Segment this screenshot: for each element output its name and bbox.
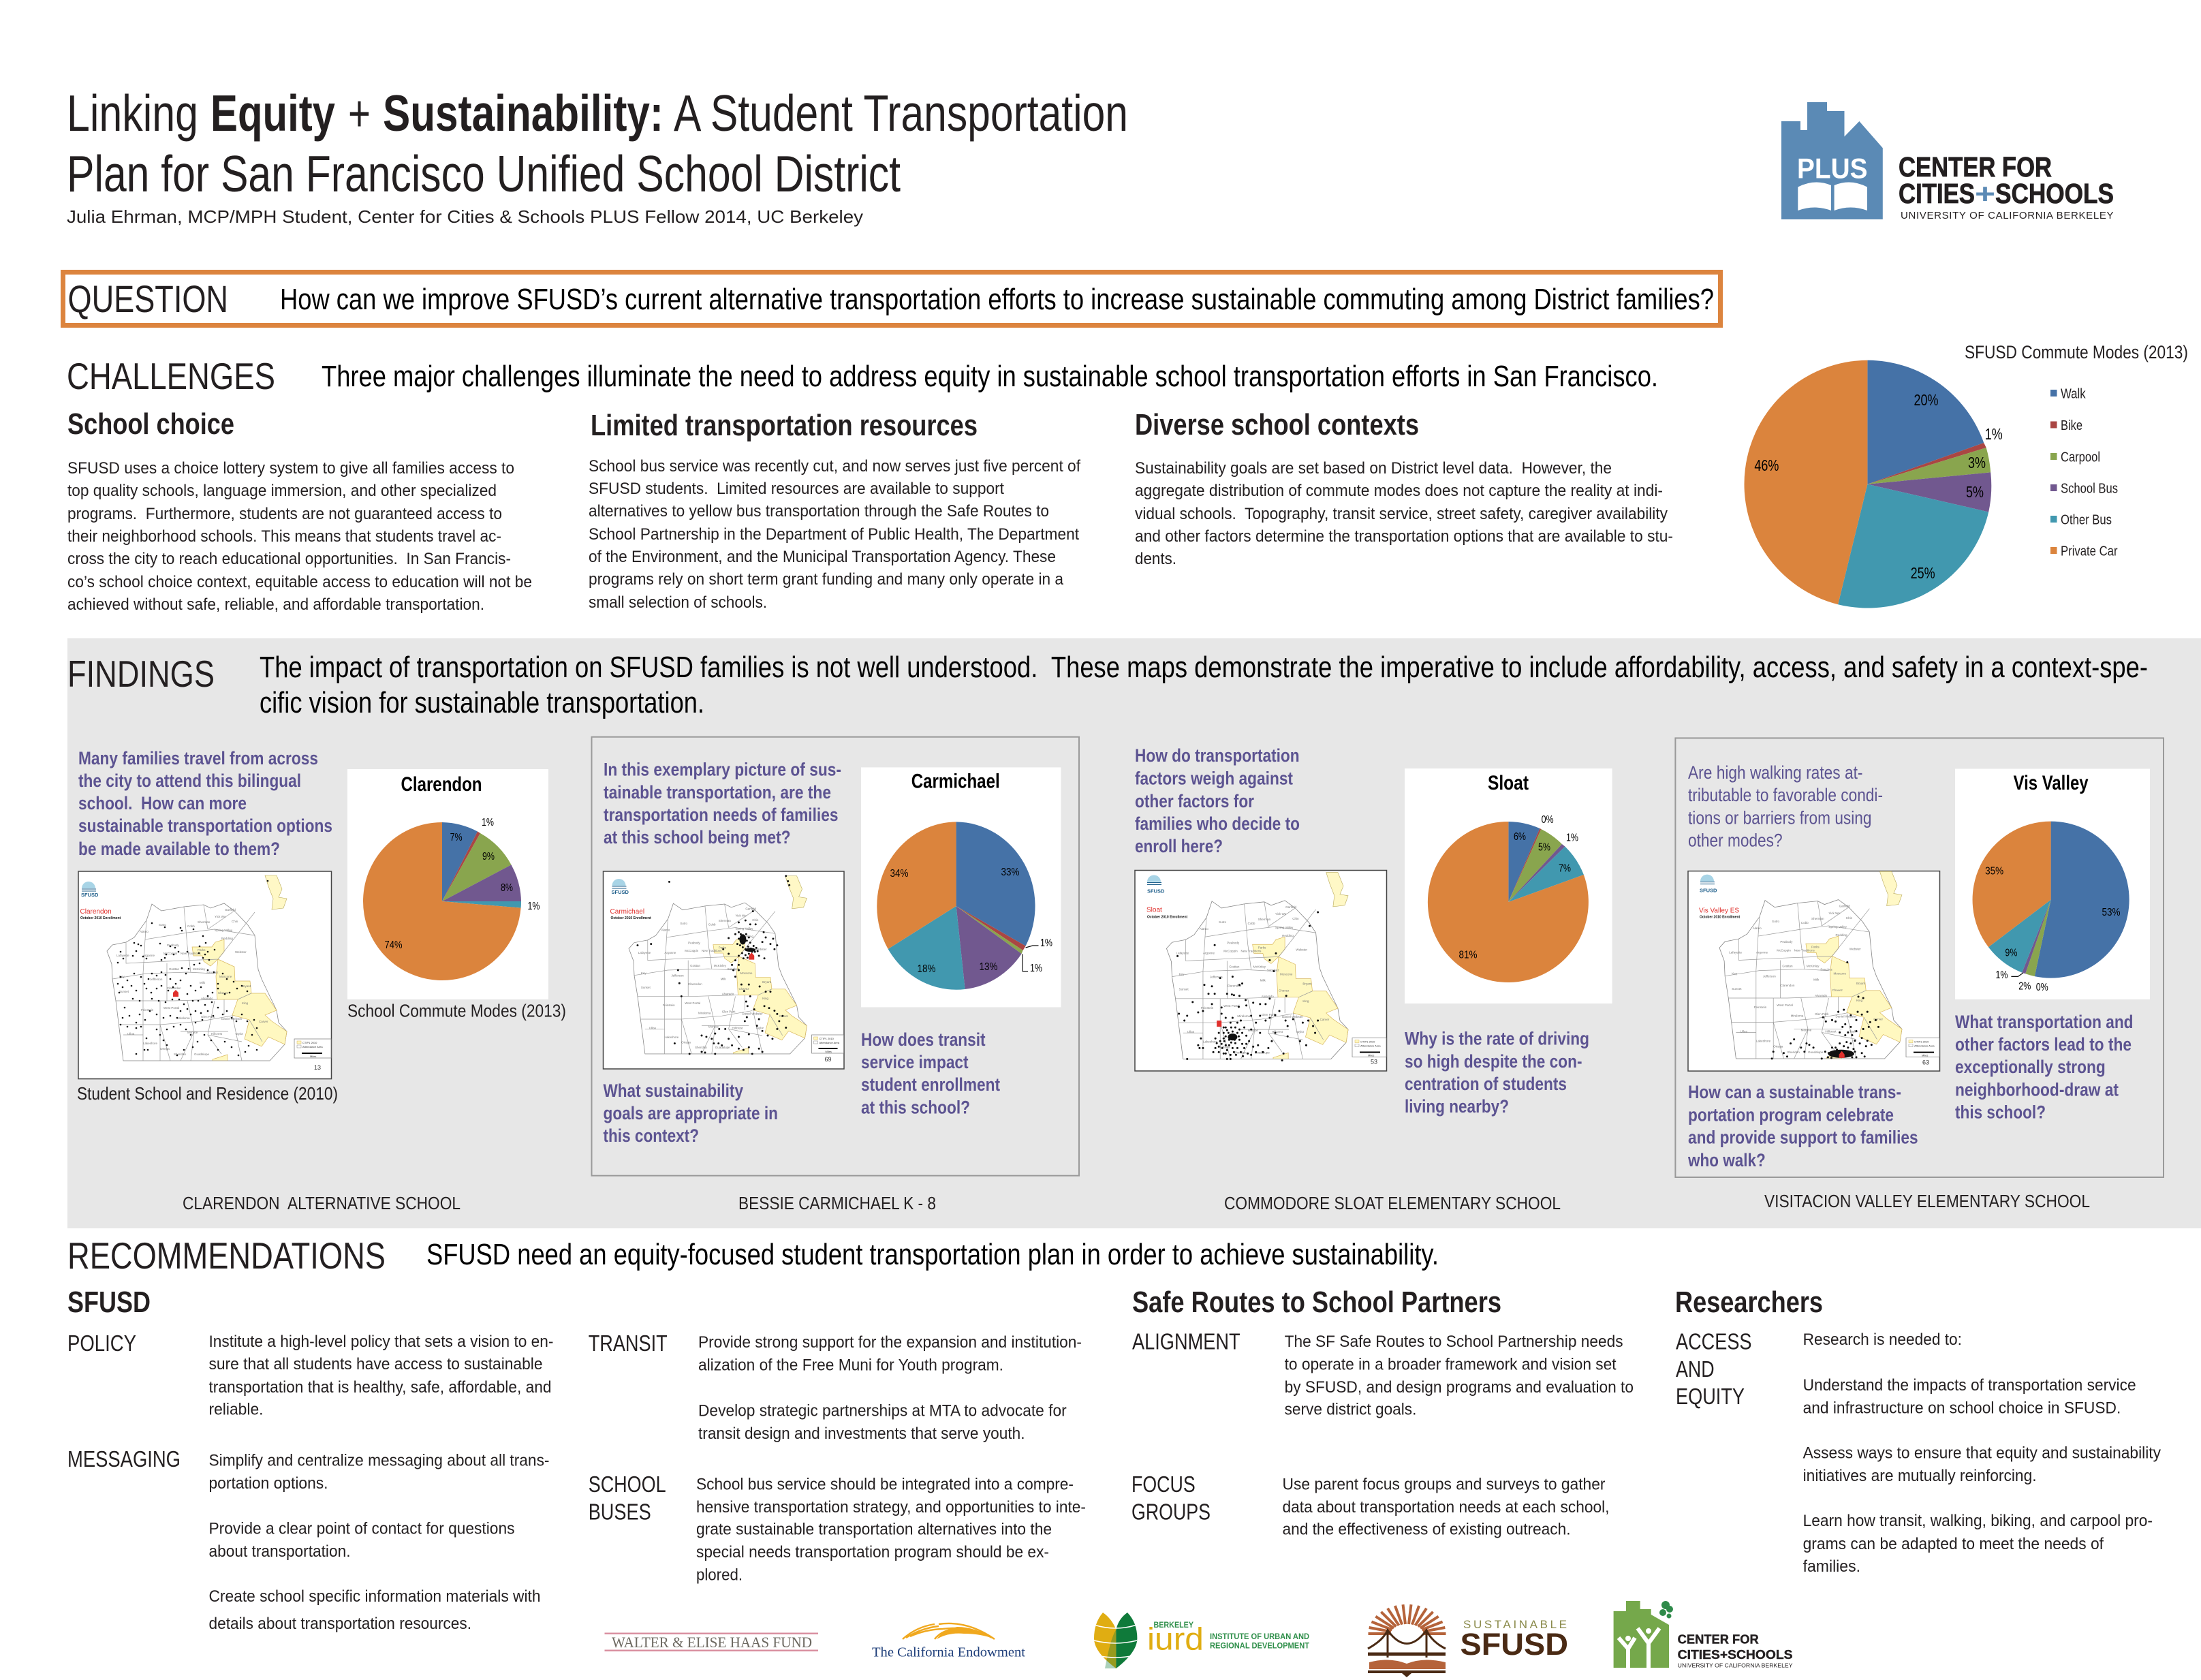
chart: Clarendon pie: 1% [527, 901, 540, 912]
map: Vis Valley residences: Miles [1922, 1054, 1928, 1057]
question: neighborhood draw: What transportation and [1955, 1012, 2134, 1032]
map: Carmichael residences: 69 [824, 1056, 832, 1063]
heading: findings: FINDINGS [67, 653, 215, 695]
questions: Carmichael top [604, 759, 841, 847]
map: Vis Valley residences: CTIP1 2010 [1914, 1040, 1929, 1044]
map: Carmichael residences: SFUSD [612, 889, 629, 895]
rec: access and equity: families. [1803, 1557, 1860, 1576]
map: Sloat residences: 53 [1371, 1059, 1377, 1065]
legend: Other Bus [2061, 513, 2112, 528]
column: school choice: achieved without safe, reliable, and affordable transportation. [67, 595, 484, 614]
logo: Center for Cities and Schools (green): UNIVERSITY OF CALIFORNIA BERKELEY [1678, 1663, 1793, 1669]
rec: focus groups: data about transportation needs at each school, [1282, 1498, 1609, 1516]
map: Carmichael residences [604, 871, 844, 1069]
column: limited transportation resources: of the Environment, and the Municipal Transportation Agency. These [589, 548, 1056, 566]
chart: SFUSD commute modes pie: 1% [1985, 425, 2003, 443]
map: Sloat residences: October 2010 Enrollment [1147, 916, 1188, 920]
rec: focus groups: FOCUS [1131, 1472, 1196, 1497]
legend: Private Car [2061, 544, 2118, 559]
rec: access and equity: and infrastructure on school choice in SFUSD. [1803, 1399, 2121, 1417]
questions: Sloat top: factors weigh against [1135, 768, 1293, 789]
question: rate of driving: Why is the rate of driving [1405, 1029, 1589, 1049]
question: sustainable transportation program: who walk? [1687, 1150, 1766, 1170]
chart: Clarendon pie: 8% [501, 882, 513, 894]
question: transit service: How does transit [861, 1029, 986, 1050]
rec: messaging: MESSAGING [67, 1446, 181, 1472]
author line: Julia Ehrman, MCP/MPH Student, Center for Cities & Schools PLUS Fellow 2014, UC Berkeley [67, 206, 863, 227]
column: school choice: co’s school choice context, equitable access to education will not be [67, 573, 532, 591]
chart: Carmichael pie [861, 767, 1061, 1007]
findings intro: cific vision for sustainable transportation. [260, 686, 704, 719]
question: transit service: at this school? [861, 1098, 970, 1118]
logo: Berkeley IURD: BERKELEY [1154, 1620, 1193, 1630]
chart: Sloat pie: 7% [1559, 863, 1571, 875]
map: Sloat residences: CTIP1 2010 [1360, 1040, 1375, 1044]
rec: messaging: portation options. [208, 1474, 328, 1493]
map: Vis Valley residences [1688, 871, 1940, 1071]
question: neighborhood draw: other factors lead to the [1955, 1034, 2132, 1055]
map: Vis Valley residences: SFUSD [1700, 888, 1717, 894]
questions: Clarendon top [78, 748, 332, 859]
logo: Center for Cities + Schools: UNIVERSITY OF CALIFORNIA BERKELEY [1901, 210, 2113, 221]
rec: focus groups: and the effectiveness of existing outreach. [1282, 1521, 1571, 1539]
rec: policy: sure that all students have access to sustainable [208, 1355, 542, 1373]
caption: student school and residence: Student School and Residence (2010) [77, 1083, 338, 1104]
questions: Carmichael top: In this exemplary picture of sus- [604, 759, 841, 779]
rec: focus groups: Use parent focus groups and surveys to gather [1282, 1476, 1606, 1493]
chart: Carmichael pie: 13% [980, 961, 997, 973]
questions: Clarendon top: the city to attend this bilingual [78, 771, 301, 791]
map: Clarendon residences: CTIP1 2010 [302, 1041, 317, 1044]
legend: Bike [2061, 418, 2082, 433]
question: sustainability goals [604, 1080, 778, 1146]
map: Sloat residences: Miles [1368, 1053, 1374, 1057]
logo: Center for Cities + Schools: CENTER FOR [1899, 151, 2052, 183]
column: diverse school contexts [1135, 408, 1673, 568]
map: Carmichael residences: Miles [826, 1050, 832, 1053]
panel: findings [67, 638, 2201, 1228]
logo: Center for Cities and Schools (green): CITIES+SCHOOLS [1678, 1648, 1793, 1662]
question: rate of driving [1405, 1029, 1589, 1117]
column: diverse school contexts: Diverse school contexts [1135, 408, 1419, 441]
rec: alignment: by SFUSD, and design programs and evaluation to [1285, 1378, 1634, 1397]
questions: Vis Valley top: other modes? [1688, 830, 1783, 851]
rec: school buses: School bus service should be integrated into a compre- [696, 1476, 1074, 1493]
questions: Clarendon top: be made available to them? [78, 839, 280, 859]
logo: Center for Cities and Schools (green) [1614, 1601, 1793, 1669]
rec: messaging [67, 1446, 549, 1633]
logo: Sustainable SFUSD [1368, 1604, 1568, 1677]
map: Carmichael residences: October 2010 Enrollment [610, 916, 651, 920]
caption: school commute modes: School Commute Modes (2013) [347, 1000, 566, 1021]
logo: Sustainable SFUSD: SFUSD [1461, 1627, 1568, 1662]
question: neighborhood draw: this school? [1955, 1102, 2046, 1123]
map: Clarendon residences [78, 871, 331, 1079]
chart: Sloat pie: Sloat [1488, 772, 1529, 794]
rec: access and equity [1676, 1329, 2161, 1576]
school name: Clarendon: CLARENDON ALTERNATIVE SCHOOL [183, 1193, 461, 1213]
question: sustainability goals: this context? [604, 1125, 699, 1146]
panel: recommendations [67, 1234, 2161, 1633]
column: limited transportation resources: School bus service was recently cut, and now serves just five percent of [589, 457, 1080, 476]
chart: Clarendon pie: Clarendon [401, 773, 482, 796]
questions: Sloat top: enroll here? [1135, 836, 1223, 856]
column: limited transportation resources: Limited transportation resources [591, 409, 978, 442]
chart: Sloat pie: 6% [1514, 831, 1526, 843]
rec: policy [67, 1331, 553, 1419]
questions: Clarendon top: school. How can more [78, 793, 247, 813]
map: Vis Valley residences: Attendance Area [1914, 1044, 1935, 1048]
logo: Center for Cities + Schools: CITIES [1899, 178, 1975, 209]
rec: access and equity: AND [1676, 1356, 1715, 1382]
rec: transit: TRANSIT [589, 1331, 668, 1356]
rec: focus groups: GROUPS [1131, 1499, 1211, 1525]
column heading: safe routes: Safe Routes to School Partners [1132, 1286, 1501, 1319]
rec: transit: alization of the Free Muni for Youth program. [698, 1356, 1003, 1374]
rec: access and equity: grams can be adapted to meet the needs of [1803, 1535, 2104, 1553]
questions: Vis Valley top [1688, 762, 1883, 851]
panel: challenges [67, 355, 1673, 614]
questions: Vis Valley top: tributable to favorable condi- [1688, 785, 1883, 805]
school name: Sloat: COMMODORE SLOAT ELEMENTARY SCHOOL [1224, 1193, 1561, 1213]
column: limited transportation resources [589, 409, 1080, 612]
column: diverse school contexts: aggregate distribution of commute modes does not capture the reality at indi- [1135, 482, 1663, 500]
rec: alignment: serve district goals. [1285, 1401, 1416, 1419]
rec: access and equity: Learn how transit, walking, biking, and carpool pro- [1803, 1512, 2153, 1530]
map: Vis Valley residences: October 2010 Enrollment [1700, 916, 1740, 920]
title: Plan for San Francisco Unified School District [67, 145, 901, 202]
school: Carmichael [591, 737, 1079, 1213]
chart: Clarendon pie [347, 769, 548, 999]
rec: access and equity: ACCESS [1676, 1329, 1752, 1354]
heading: challenges: CHALLENGES [67, 355, 275, 397]
logo: The California Endowment: The California Endowment [872, 1645, 1025, 1660]
chart: Carmichael pie: Carmichael [911, 771, 1000, 793]
chart: Clarendon pie: 74% [384, 939, 402, 951]
title [67, 84, 1128, 202]
questions: Sloat top: families who decide to [1135, 813, 1300, 834]
rec: school buses: BUSES [589, 1499, 651, 1525]
chart: Vis Valley pie: 35% [1985, 866, 2003, 877]
chart: Vis Valley pie: Vis Valley [2014, 772, 2089, 794]
chart: Clarendon pie: 7% [450, 832, 463, 843]
questions: Clarendon top: sustainable transportation options [78, 815, 332, 836]
logo: Berkeley IURD: REGIONAL DEVELOPMENT [1210, 1640, 1310, 1650]
chart: SFUSD commute modes pie: 20% [1914, 391, 1939, 409]
column heading: researchers: Researchers [1675, 1286, 1823, 1319]
logo: Center for Cities + Schools: SCHOOLS [1995, 178, 2114, 209]
rec: transit [589, 1331, 1082, 1443]
recommendations intro: SFUSD need an equity-focused student transportation plan in order to achieve sustainability. [426, 1238, 1439, 1271]
findings intro [260, 651, 2148, 719]
rec: access and equity: Understand the impacts of transportation service [1803, 1376, 2136, 1395]
chart: SFUSD commute modes pie: 25% [1911, 564, 1935, 582]
rec: policy: transportation that is healthy, safe, affordable, and [208, 1378, 552, 1397]
column: school choice [67, 407, 532, 614]
questions: Sloat top [1135, 745, 1300, 856]
column: limited transportation resources: School Partnership in the Department of Public Health, The Department [589, 525, 1079, 544]
rec: transit: transit design and investments that serve youth. [698, 1425, 1025, 1443]
question: transit service: service impact [861, 1052, 969, 1072]
map: Clarendon residences: Attendance Area [302, 1045, 323, 1048]
questions: Carmichael top: transportation needs of families [604, 805, 838, 825]
chart: Carmichael pie: 1% [1040, 937, 1052, 949]
rec: focus groups [1131, 1472, 1609, 1539]
rec: transit: Develop strategic partnerships at MTA to advocate for [698, 1402, 1067, 1420]
question: rate of driving: so high despite the con- [1405, 1051, 1582, 1072]
questions: Carmichael top: tainable transportation, are the [604, 782, 831, 803]
column: school choice: programs. Furthermore, students are not guaranteed access to [67, 505, 502, 523]
question: transit service: student enrollment [861, 1074, 1000, 1095]
rec: access and equity: Research is needed to: [1803, 1331, 1962, 1349]
map: Carmichael residences: Attendance Area [819, 1041, 840, 1044]
chart: Vis Valley pie [1955, 768, 2150, 999]
logo: Sustainable SFUSD: SUSTAINABLE [1463, 1618, 1567, 1631]
chart: Carmichael pie: 1% [1030, 963, 1042, 974]
title: + [348, 84, 371, 142]
column: limited transportation resources: alternatives to yellow bus transportation through the Safe Routes to [589, 502, 1049, 520]
questions: Vis Valley top: Are high walking rates at- [1688, 762, 1862, 783]
rec: school buses: plored. [696, 1566, 743, 1584]
column: school choice: cross the city to reach educational opportunities. In San Francis- [67, 550, 511, 568]
column: diverse school contexts: vidual schools. Topography, transit service, street safety, caregiver availability [1135, 505, 1668, 523]
column: school choice: their neighborhood schools. This means that students travel ac- [67, 527, 501, 546]
column: diverse school contexts: Sustainability goals are set based on District level data. However, the [1135, 459, 1612, 478]
column: limited transportation resources: programs rely on short term grant funding and many only operate in a [589, 570, 1064, 589]
question: sustainability goals: What sustainability [604, 1080, 743, 1101]
question: sustainable transportation program: and provide support to families [1688, 1127, 1918, 1147]
rec: policy: Institute a high-level policy that sets a vision to en- [208, 1333, 553, 1351]
logo: Center for Cities + Schools: + [1975, 178, 1995, 209]
rec: access and equity: initiatives are mutually reinforcing. [1803, 1467, 2037, 1485]
logo: Berkeley IURD: iurd [1147, 1621, 1204, 1657]
title: Linking [67, 84, 198, 142]
column: limited transportation resources: small selection of schools. [589, 593, 767, 612]
logo: Walter and Elise Haas Fund: WALTER & ELISE HAAS FUND [612, 1634, 812, 1651]
column: limited transportation resources: SFUSD students. Limited resources are available to support [589, 480, 1004, 498]
panel: question [63, 273, 1721, 326]
rec: school buses: hensive transportation strategy, and opportunities to inte- [696, 1498, 1086, 1516]
question: transit service [861, 1029, 1000, 1118]
chart: Clarendon pie: 9% [482, 851, 495, 862]
questions: Sloat top: How do transportation [1135, 745, 1300, 766]
question: neighborhood draw: exceptionally strong [1955, 1057, 2106, 1077]
chart: Carmichael pie: 33% [1001, 867, 1019, 878]
chart: SFUSD commute modes pie: 46% [1754, 456, 1779, 474]
map: Carmichael residences: Carmichael [610, 908, 644, 916]
map: Vis Valley residences: 63 [1922, 1059, 1929, 1066]
map: Carmichael residences: CTIP1 2010 [819, 1037, 834, 1040]
chart: Sloat pie: 81% [1459, 950, 1477, 961]
rec: policy: reliable. [208, 1401, 263, 1419]
legend: Carpool [2061, 450, 2100, 465]
question: neighborhood draw: neighborhood-draw at [1955, 1080, 2119, 1100]
title: Equity [210, 84, 335, 142]
questions: Clarendon top: Many families travel from across [78, 748, 318, 768]
chart: Vis Valley pie: 2% [2018, 980, 2031, 992]
question: sustainable transportation program [1687, 1082, 1918, 1170]
question: neighborhood draw [1955, 1012, 2134, 1123]
map: Sloat residences: Sloat [1146, 906, 1162, 914]
rec: alignment [1132, 1329, 1634, 1419]
rec: alignment: The SF Safe Routes to School Partnership needs [1285, 1333, 1623, 1351]
rec: school buses: SCHOOL [589, 1472, 666, 1497]
school: Clarendon [77, 748, 566, 1213]
column: diverse school contexts: and other factors determine the transportation options that are available to stu- [1135, 527, 1673, 546]
school name: Carmichael: BESSIE CARMICHAEL K - 8 [738, 1193, 936, 1213]
logo: Center for Cities + Schools: PLUS [1797, 153, 1868, 185]
column: diverse school contexts: dents. [1135, 550, 1176, 568]
chart: Carmichael pie: 34% [890, 868, 909, 880]
question: sustainable transportation program: How can a sustainable trans- [1688, 1082, 1901, 1102]
rec: alignment: to operate in a broader framework and vision set [1285, 1356, 1617, 1373]
logo: Berkeley IURD [1094, 1613, 1310, 1668]
chart: Sloat pie: 5% [1538, 842, 1550, 854]
rec: access and equity: EQUITY [1676, 1384, 1745, 1409]
legend: Walk [2061, 387, 2086, 402]
rec: access and equity: Assess ways to ensure that equity and sustainability [1803, 1444, 2161, 1463]
chart: Carmichael pie: 18% [917, 963, 936, 975]
rec: messaging: Provide a clear point of contact for questions [208, 1519, 515, 1538]
map: Clarendon residences: 13 [314, 1064, 321, 1071]
rec: messaging: details about transportation resources. [208, 1615, 471, 1633]
panel: question: QUESTION [68, 277, 228, 320]
map: Vis Valley residences: Vis Valley ES [1699, 907, 1739, 915]
rec: messaging: Create school specific information materials with [208, 1587, 541, 1606]
panel: question: How can we improve SFUSD’s current alternative transportation efforts to increase sustainable commuting among District families? [280, 283, 1714, 316]
chart: Vis Valley pie: 1% [1996, 969, 2008, 981]
rec: alignment: ALIGNMENT [1132, 1329, 1240, 1354]
title: Sustainability: [383, 84, 664, 142]
school name: Vis Valley: VISITACION VALLEY ELEMENTARY SCHOOL [1764, 1191, 2090, 1211]
chart: Vis Valley pie: 53% [2102, 907, 2120, 918]
school: Sloat [1135, 745, 1612, 1213]
questions: Sloat top: other factors for [1135, 791, 1254, 811]
legend: School Bus [2061, 482, 2118, 497]
rec: transit: Provide strong support for the expansion and institution- [698, 1333, 1082, 1352]
chart: Sloat pie [1405, 768, 1612, 1004]
rec: messaging: Simplify and centralize messaging about all trans- [208, 1451, 549, 1470]
chart: Vis Valley pie: 0% [2036, 982, 2048, 993]
logo: Berkeley IURD: INSTITUTE OF URBAN AND [1210, 1632, 1309, 1641]
question: rate of driving: living nearby? [1405, 1096, 1509, 1117]
column heading: SFUSD: SFUSD [67, 1286, 151, 1319]
chart: Sloat pie: 0% [1542, 814, 1554, 826]
rec: school buses [589, 1472, 1086, 1584]
question: rate of driving: centration of students [1405, 1074, 1567, 1094]
question: sustainability goals: goals are appropriate in [604, 1103, 778, 1123]
logo: Center for Cities + Schools [1781, 102, 2114, 221]
rec: school buses: grate sustainable transportation alternatives into the [696, 1521, 1052, 1539]
map: Sloat residences: SFUSD [1147, 888, 1165, 894]
map: Clarendon residences: Clarendon [80, 908, 112, 916]
chart: SFUSD commute modes pie: 3% [1968, 454, 1986, 471]
school: Vis Valley [1675, 738, 2164, 1211]
rec: school buses: special needs transportation program should be ex- [696, 1543, 1049, 1561]
logo: The California Endowment [872, 1623, 1025, 1660]
column: school choice: School choice [67, 407, 234, 441]
logo: Center for Cities and Schools (green): CENTER FOR [1678, 1633, 1759, 1647]
chart: Vis Valley pie: 9% [2005, 947, 2017, 959]
challenges intro: Three major challenges illuminate the need to address equity in sustainable school transportation efforts in San Francisco. [322, 360, 1658, 393]
chart: Sloat pie: 1% [1566, 833, 1578, 843]
chart: Clarendon pie: 1% [482, 817, 494, 828]
rec: policy: POLICY [67, 1331, 136, 1356]
chart: SFUSD commute modes pie: 5% [1966, 483, 1984, 501]
map: Clarendon residences: October 2010 Enrollment [80, 916, 121, 920]
map: Sloat residences [1135, 871, 1387, 1071]
question: sustainable transportation program: portation program celebrate [1688, 1105, 1894, 1125]
column: school choice: SFUSD uses a choice lottery system to give all families access to [67, 459, 514, 478]
heading: recommendations: RECOMMENDATIONS [67, 1234, 386, 1277]
rec: messaging: about transportation. [208, 1542, 350, 1561]
questions: Carmichael top: at this school being met? [604, 827, 791, 847]
legend [2050, 387, 2118, 559]
title: A Student Transportation [674, 84, 1128, 142]
questions: Vis Valley top: tions or barriers from using [1688, 808, 1872, 828]
map: Sloat residences: Attendance Area [1360, 1044, 1381, 1048]
column: school choice: top quality schools, language immersion, and other specialized [67, 482, 497, 500]
map: Clarendon residences: Miles [310, 1055, 316, 1058]
chart: SFUSD commute modes pie [1744, 342, 2188, 608]
map: Clarendon residences: SFUSD [81, 892, 99, 898]
